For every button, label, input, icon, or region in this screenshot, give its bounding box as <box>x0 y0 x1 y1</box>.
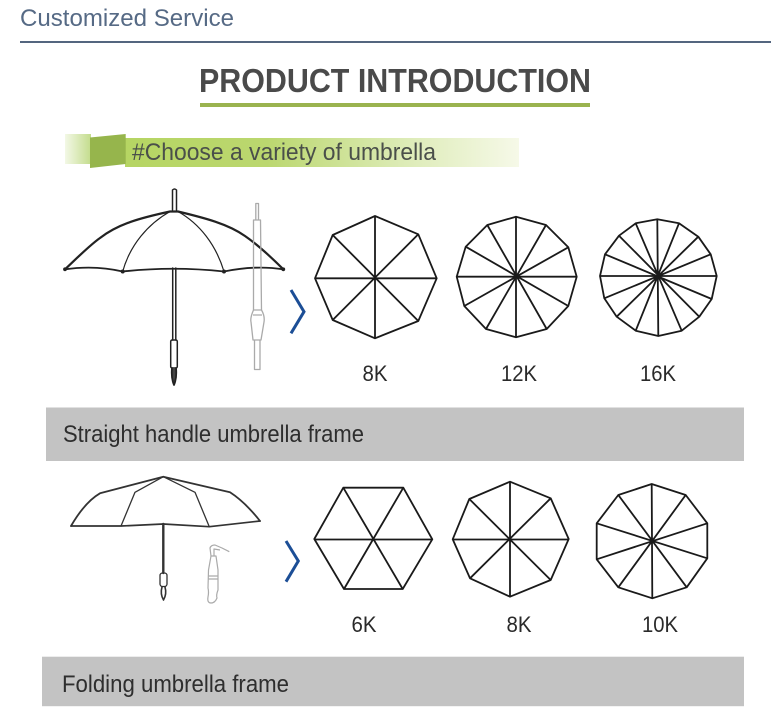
label: folding 8K: 8K <box>506 612 532 637</box>
diagram: folding 8K canopy <box>453 482 569 597</box>
icon: closed straight umbrella <box>251 204 264 370</box>
label: 6K: 6K <box>352 612 377 637</box>
diagram: 10K canopy <box>597 484 707 598</box>
page header: Customized Service: Customized Service <box>20 5 234 32</box>
diagram: 6K canopy <box>314 488 432 589</box>
diagram: 12K canopy <box>457 217 577 337</box>
arrow: folding <box>286 541 298 582</box>
arrow: straight handle <box>291 290 304 333</box>
label: 10K: 10K <box>642 612 678 637</box>
band: folding umbrella frame <box>42 657 744 706</box>
title: PRODUCT INTRODUCTION: PRODUCT INTRODUCTION <box>199 62 591 99</box>
icon: open straight handle umbrella <box>64 189 285 385</box>
label: 12K: 12K <box>501 361 537 386</box>
section banner: choose a variety of umbrella <box>65 134 519 168</box>
icon: open folding umbrella <box>71 477 260 600</box>
icon: closed folding umbrella <box>208 545 229 603</box>
band: folding umbrella frame: Folding umbrella frame <box>62 671 289 698</box>
diagram: 8K canopy <box>315 216 437 338</box>
band: straight handle umbrella frame: Straight handle umbrella frame <box>63 421 364 448</box>
diagram: 16K canopy <box>600 219 717 336</box>
band: straight handle umbrella frame <box>46 408 744 461</box>
label: 16K: 16K <box>640 361 676 386</box>
section banner: choose a variety of umbrella: #Choose a variety of umbrella <box>132 139 437 166</box>
label: 8K: 8K <box>362 361 388 386</box>
